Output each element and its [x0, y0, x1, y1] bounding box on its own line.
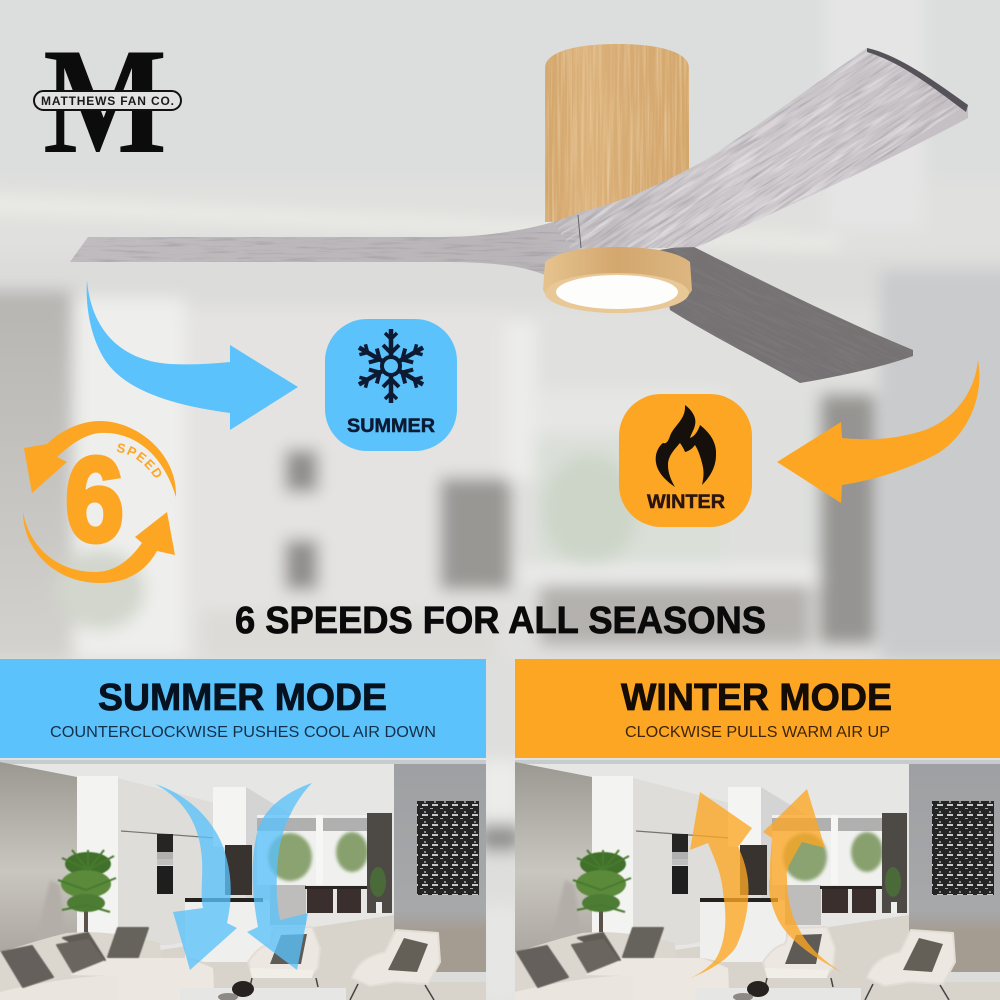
icon: snowflake: [355, 329, 427, 403]
logo: M: [43, 17, 167, 185]
arrow: winter airflow: [777, 360, 979, 503]
numeral 6: 6: [65, 433, 124, 567]
arrow: summer airflow: [87, 280, 298, 430]
main blades: [70, 48, 968, 274]
winter badge: [619, 394, 752, 527]
fan canopy: [545, 44, 689, 222]
fan: [60, 0, 1000, 463]
photo: summer room: [0, 760, 486, 1000]
winter heading: WINTER MODE: [621, 677, 892, 719]
panel: summer mode: [0, 659, 486, 758]
logo wordmark: [34, 91, 181, 110]
6 speed icon: [23, 421, 176, 583]
winter badge: WINTER: [647, 492, 725, 513]
logo wordmark: MATTHEWS FAN CO.: [41, 94, 174, 108]
speed label: SPEED: [116, 444, 162, 478]
summer caption: COUNTERCLOCKWISE PUSHES COOL AIR DOWN: [50, 724, 436, 741]
panel: winter mode: [515, 659, 1000, 758]
dark blade: [660, 247, 913, 383]
photo: winter room: [515, 760, 1000, 1000]
bottom rotation arrow: [23, 512, 175, 583]
arrow: cool air right: [247, 783, 312, 970]
arrow: warm air left: [688, 792, 752, 979]
icon: flame: [656, 405, 716, 487]
winter caption: CLOCKWISE PULLS WARM AIR UP: [625, 724, 890, 741]
summer badge: SUMMER: [347, 416, 435, 437]
summer badge: [325, 319, 457, 451]
arrow: warm air right: [763, 789, 843, 973]
arrow: cool air left: [155, 784, 237, 970]
light ring: [543, 247, 692, 313]
headline: 6 SPEEDS FOR ALL SEASONS: [235, 600, 766, 642]
summer heading: SUMMER MODE: [98, 677, 387, 719]
led light: [556, 275, 678, 309]
top rotation arrow: [24, 421, 176, 497]
